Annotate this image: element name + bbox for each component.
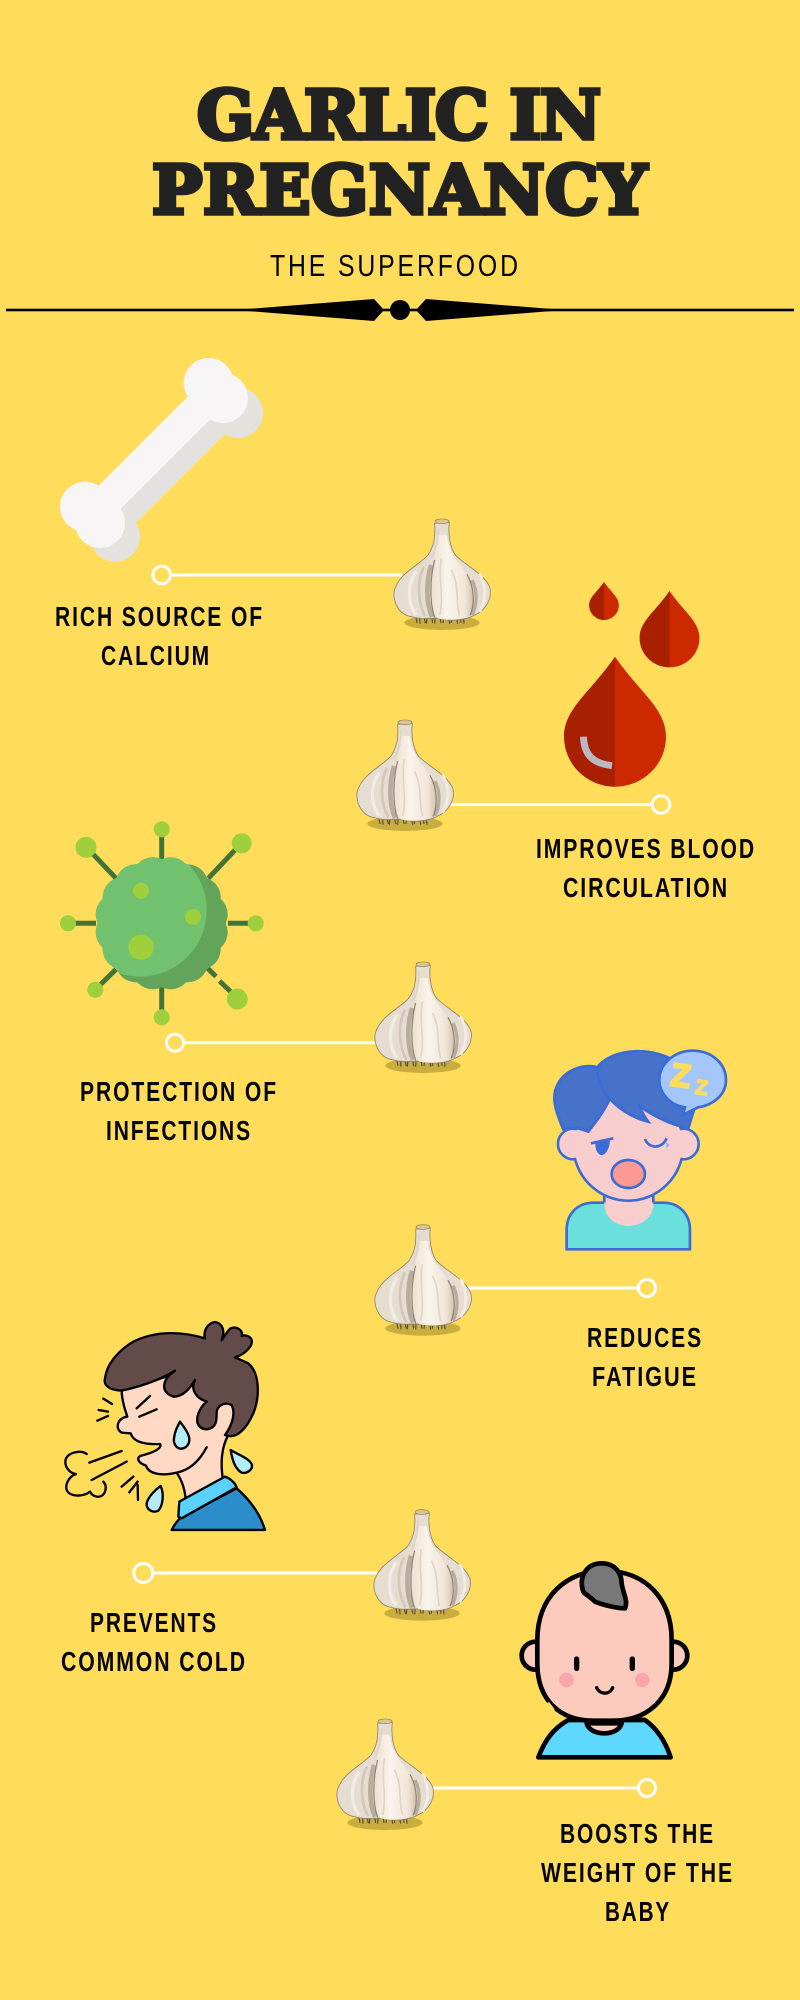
label [61,1607,247,1677]
label: CALCIUM [101,640,211,671]
connector line [153,566,402,584]
label [80,1076,278,1146]
garlic bulb [394,519,490,630]
icon: bone [60,358,263,562]
label [536,833,756,903]
connector line [134,1564,377,1582]
item 2: blood circulation [357,582,756,903]
subtitle: THE SUPERFOOD [270,248,518,283]
garlic bulb [375,1225,471,1336]
label: PREVENTS [90,1607,218,1638]
connector line [450,796,670,813]
title [152,76,648,230]
connector line [468,1280,656,1296]
icon: virus [60,821,264,1025]
title: PREGNANCY [152,150,648,230]
item 6: baby weight [337,1563,734,1927]
label: WEIGHT OF THE [541,1857,734,1888]
garlic bulb [374,1510,470,1621]
label: COMMON COLD [61,1646,247,1677]
ornamental divider [6,299,794,321]
label [55,601,264,671]
title: GARLIC IN [197,76,601,154]
connector line [433,1780,656,1796]
label: INFECTIONS [106,1115,252,1146]
label: FATIGUE [592,1361,698,1392]
garlic bulb [337,1719,433,1830]
garlic bulb [357,720,453,831]
label: RICH SOURCE OF [55,601,264,632]
icon: yawning boy [554,1051,726,1249]
label [587,1322,703,1392]
item 4: fatigue [375,1051,726,1392]
label: REDUCES [587,1322,703,1353]
label [541,1818,734,1927]
icon: blood drops [564,582,699,787]
icon: sneezing man [65,1322,265,1530]
item 3: infections [60,821,471,1146]
icon: yawning boy: Z [668,1056,693,1095]
label: CIRCULATION [563,872,729,903]
icon: baby [522,1563,687,1757]
label: BOOSTS THE [560,1818,715,1849]
garlic bulb [375,962,471,1073]
label: BABY [605,1896,671,1927]
item 5: common cold [61,1322,470,1677]
icon: yawning boy: Z [694,1076,710,1100]
connector line [166,1034,377,1051]
item 1: calcium [55,358,490,671]
label: PROTECTION OF [80,1076,278,1107]
